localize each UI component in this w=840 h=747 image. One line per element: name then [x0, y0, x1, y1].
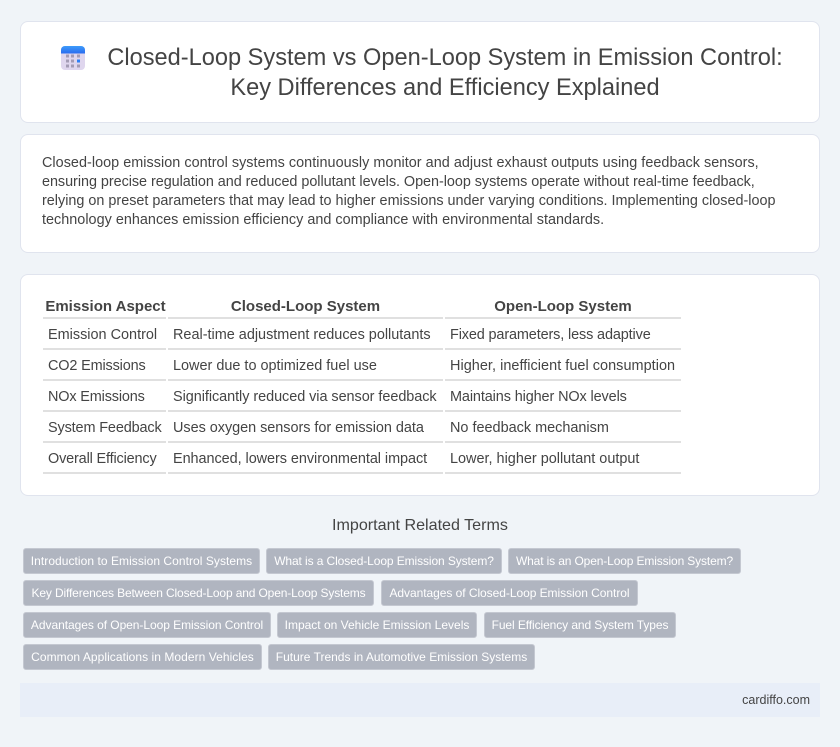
- row: CO2 emissions: CO2 Emissions: [48, 358, 146, 374]
- tag: [23, 580, 374, 606]
- intro paragraph: [42, 155, 776, 228]
- tag: What is a Closed-Loop Emission System?: [274, 554, 494, 568]
- table header row: Closed-Loop System: [231, 298, 380, 315]
- tag: [23, 548, 260, 574]
- tag: Advantages of Closed-Loop Emission Control: [389, 586, 630, 600]
- tag: Fuel Efficiency and System Types: [492, 618, 668, 632]
- row: NOx emissions: NOx Emissions: [48, 389, 145, 405]
- row: NOx emissions: [48, 389, 627, 405]
- row: emission control: Emission Control: [48, 327, 157, 343]
- row: system feedback: [48, 420, 609, 436]
- row: system feedback: Uses oxygen sensors for emission data: [173, 420, 424, 436]
- title: Key Differences and Efficiency Explained: [230, 75, 660, 101]
- intro card: [20, 134, 820, 253]
- tag: [381, 580, 638, 606]
- tag: [508, 548, 741, 574]
- intro paragraph: ensuring precise regulation and reduced pollutant levels. Open-loop systems operate without real-time feedback,: [42, 174, 755, 190]
- row: overall efficiency: [48, 451, 640, 467]
- row: overall efficiency: Enhanced, lowers environmental impact: [173, 451, 427, 467]
- row: system feedback: No feedback mechanism: [450, 420, 609, 436]
- tag: [23, 612, 271, 638]
- row: NOx emissions: Significantly reduced via sensor feedback: [173, 389, 437, 405]
- footer source text: cardiffo.com: [742, 693, 810, 707]
- intro paragraph: Closed-loop emission control systems continuously monitor and adjust exhaust outputs using feedback sensors,: [42, 155, 759, 171]
- tag: Key Differences Between Closed-Loop and Open-Loop Systems: [32, 586, 366, 600]
- table header row: [45, 298, 632, 315]
- row: CO2 emissions: Lower due to optimized fuel use: [173, 358, 377, 374]
- tag: Advantages of Open-Loop Emission Control: [31, 618, 263, 632]
- icon: calendar grid: [61, 46, 85, 70]
- tag: [277, 612, 477, 638]
- footer bar: [20, 683, 820, 717]
- tag: Introduction to Emission Control Systems: [31, 554, 252, 568]
- intro paragraph: relying on preset parameters that may lead to higher emissions under varying conditions. Implementing closed-loop: [42, 193, 776, 209]
- table card: [20, 274, 820, 496]
- tag: Common Applications in Modern Vehicles: [31, 650, 254, 664]
- row: CO2 emissions: Higher, inefficient fuel consumption: [450, 358, 675, 374]
- row: overall efficiency: Lower, higher pollutant output: [450, 451, 639, 467]
- row: overall efficiency: Overall Efficiency: [48, 451, 157, 467]
- header card: [20, 21, 820, 123]
- related terms heading: Important Related Terms: [332, 516, 508, 534]
- tag: Impact on Vehicle Emission Levels: [285, 618, 469, 632]
- table header row: Emission Aspect: [45, 298, 166, 315]
- title: Closed-Loop System vs Open-Loop System in Emission Control:: [107, 45, 783, 71]
- title: [107, 45, 783, 101]
- row: emission control: Real-time adjustment reduces pollutants: [173, 327, 431, 343]
- tag: [268, 644, 535, 670]
- tag: [23, 644, 262, 670]
- row: system feedback: System Feedback: [48, 420, 162, 436]
- tag: [484, 612, 676, 638]
- row: emission control: [48, 327, 651, 343]
- row: NOx emissions: Maintains higher NOx levels: [450, 389, 627, 405]
- tag: [266, 548, 502, 574]
- tag list: [23, 548, 741, 670]
- table header row: Open-Loop System: [494, 298, 632, 315]
- intro paragraph: technology enhances emission efficiency and compliance with environmental standards.: [42, 212, 604, 228]
- tag: Future Trends in Automotive Emission Systems: [276, 650, 527, 664]
- row: CO2 emissions: [48, 358, 675, 374]
- row: emission control: Fixed parameters, less adaptive: [450, 327, 651, 343]
- tag: What is an Open-Loop Emission System?: [516, 554, 733, 568]
